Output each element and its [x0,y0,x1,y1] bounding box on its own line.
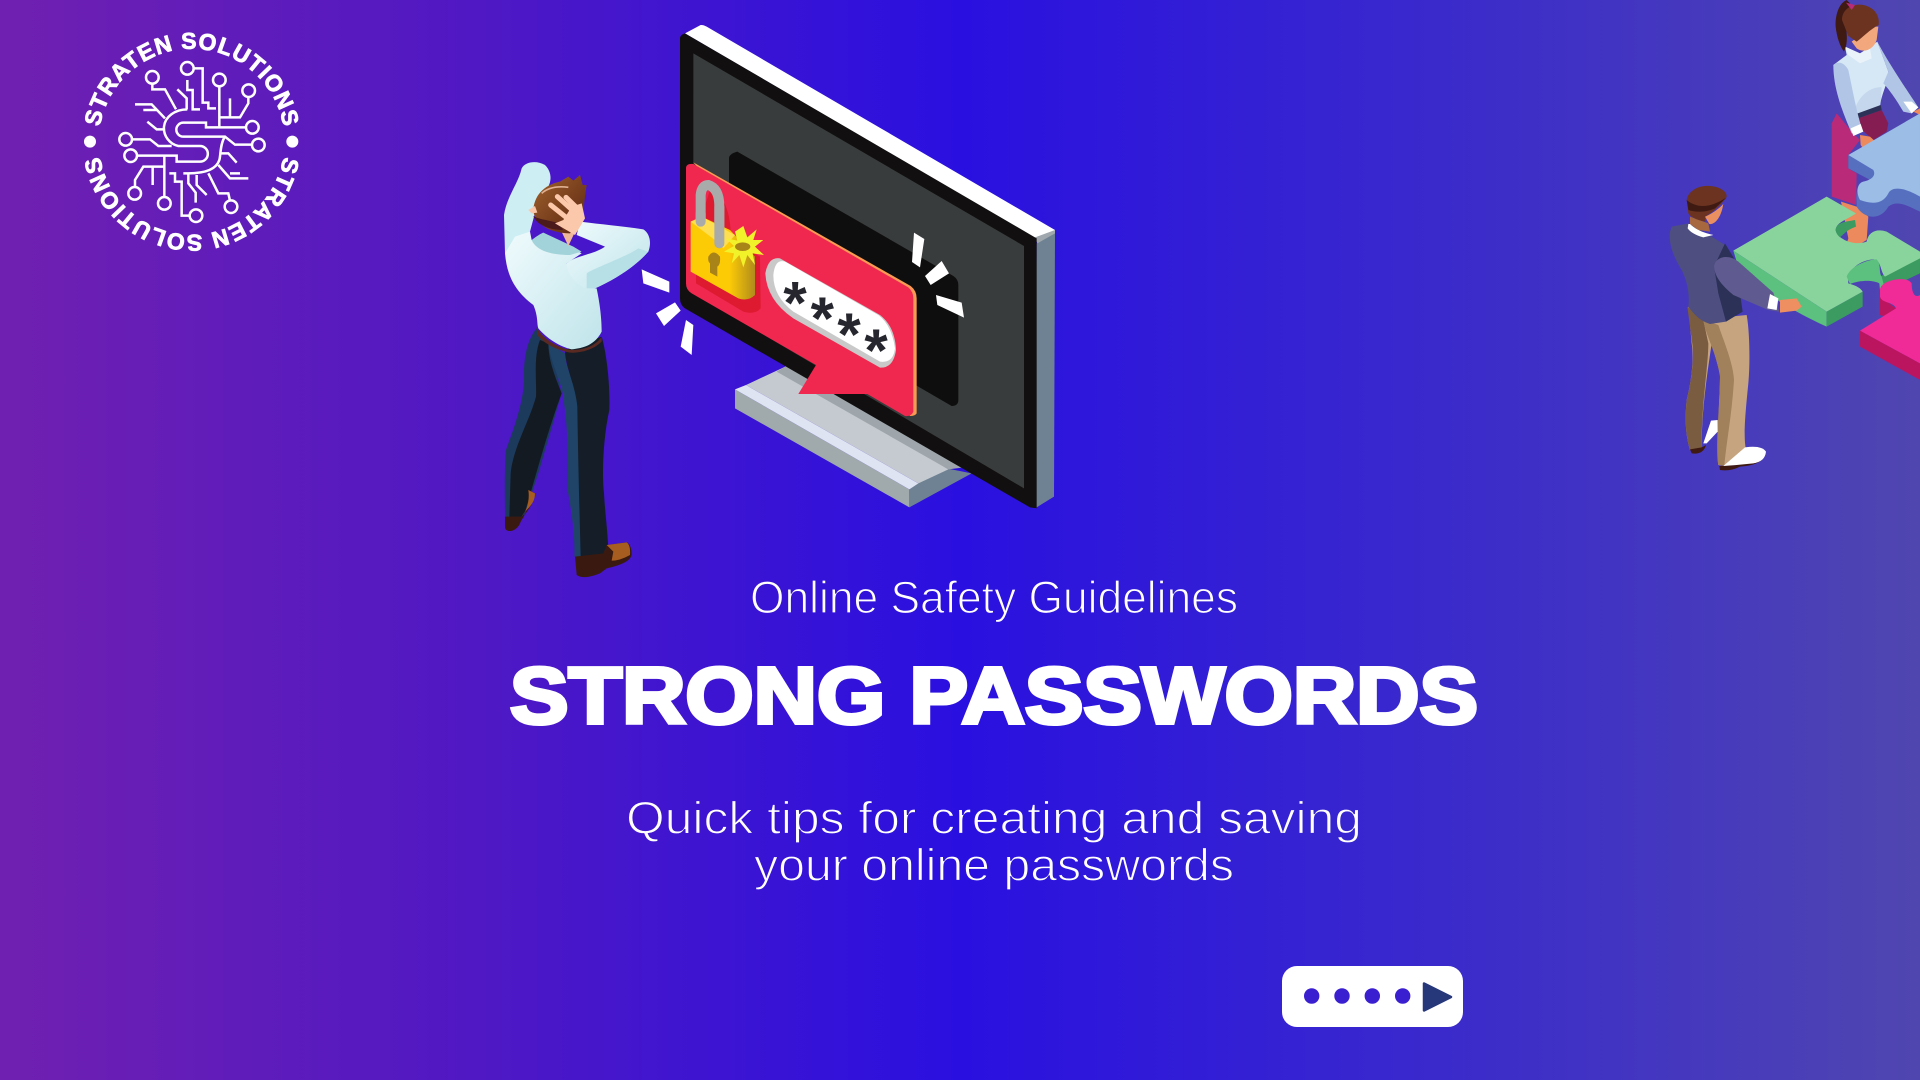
illustration: stressed man holding his head [504,162,650,577]
hair [533,175,587,233]
blue puzzle piece [1848,113,1920,217]
tagline: your online passwords [754,840,1234,890]
illustration: team assembling puzzle [1670,0,1920,470]
monitor bezel [680,33,1037,508]
password asterisks: * [783,269,807,336]
tagline [626,792,1362,890]
monitor stand [735,362,972,507]
magenta puzzle piece [1860,279,1920,380]
logo ring text top: STRATEN SOLUTIONS [84,32,298,126]
password asterisks [783,269,888,384]
hands on head [528,197,585,235]
password asterisks: * [864,317,888,384]
password field [765,258,896,384]
sparks right of alert [912,233,964,318]
monitor side and top edges [685,25,1055,238]
left shoe [505,490,535,531]
neck [560,228,577,246]
green puzzle piece [1733,197,1920,327]
shirt body [505,232,602,349]
man's trousers [1686,307,1749,466]
monitor screen [693,53,1024,488]
tagline: Quick tips for creating and saving [626,792,1362,844]
dark window on screen [729,152,958,406]
woman's torso [1833,42,1918,136]
illustration: monitor with password alert [680,25,1055,508]
bent arm [567,222,650,289]
right trouser leg [548,343,582,557]
man's head [1687,186,1727,237]
raised arm [504,162,551,253]
red speech bubble [686,162,917,416]
logo: Straten Solutions [84,32,298,252]
left trouser leg [505,328,562,518]
right shoe [575,542,632,577]
logo ring text bottom: STRATEN SOLUTIONS [85,158,298,252]
password asterisks: * [837,301,861,368]
padlock [691,185,764,313]
main title: STRONG PASSWORDS [510,651,1478,740]
man's sweater [1670,223,1802,324]
woman's head [1836,0,1879,52]
sparks left of monitor [642,269,693,355]
password asterisks: * [811,285,835,352]
logo circuit S emblem [84,62,298,222]
woman's hands [1860,108,1920,153]
next button: dots and arrow [1282,966,1463,1027]
belt [537,327,602,353]
woman's skirt [1832,110,1888,205]
subtitle: Online Safety Guidelines: Online Safety Guidelines [750,572,1238,623]
woman's leg [1841,202,1868,245]
man's shoes [1690,420,1766,470]
shirt collar [532,233,582,255]
